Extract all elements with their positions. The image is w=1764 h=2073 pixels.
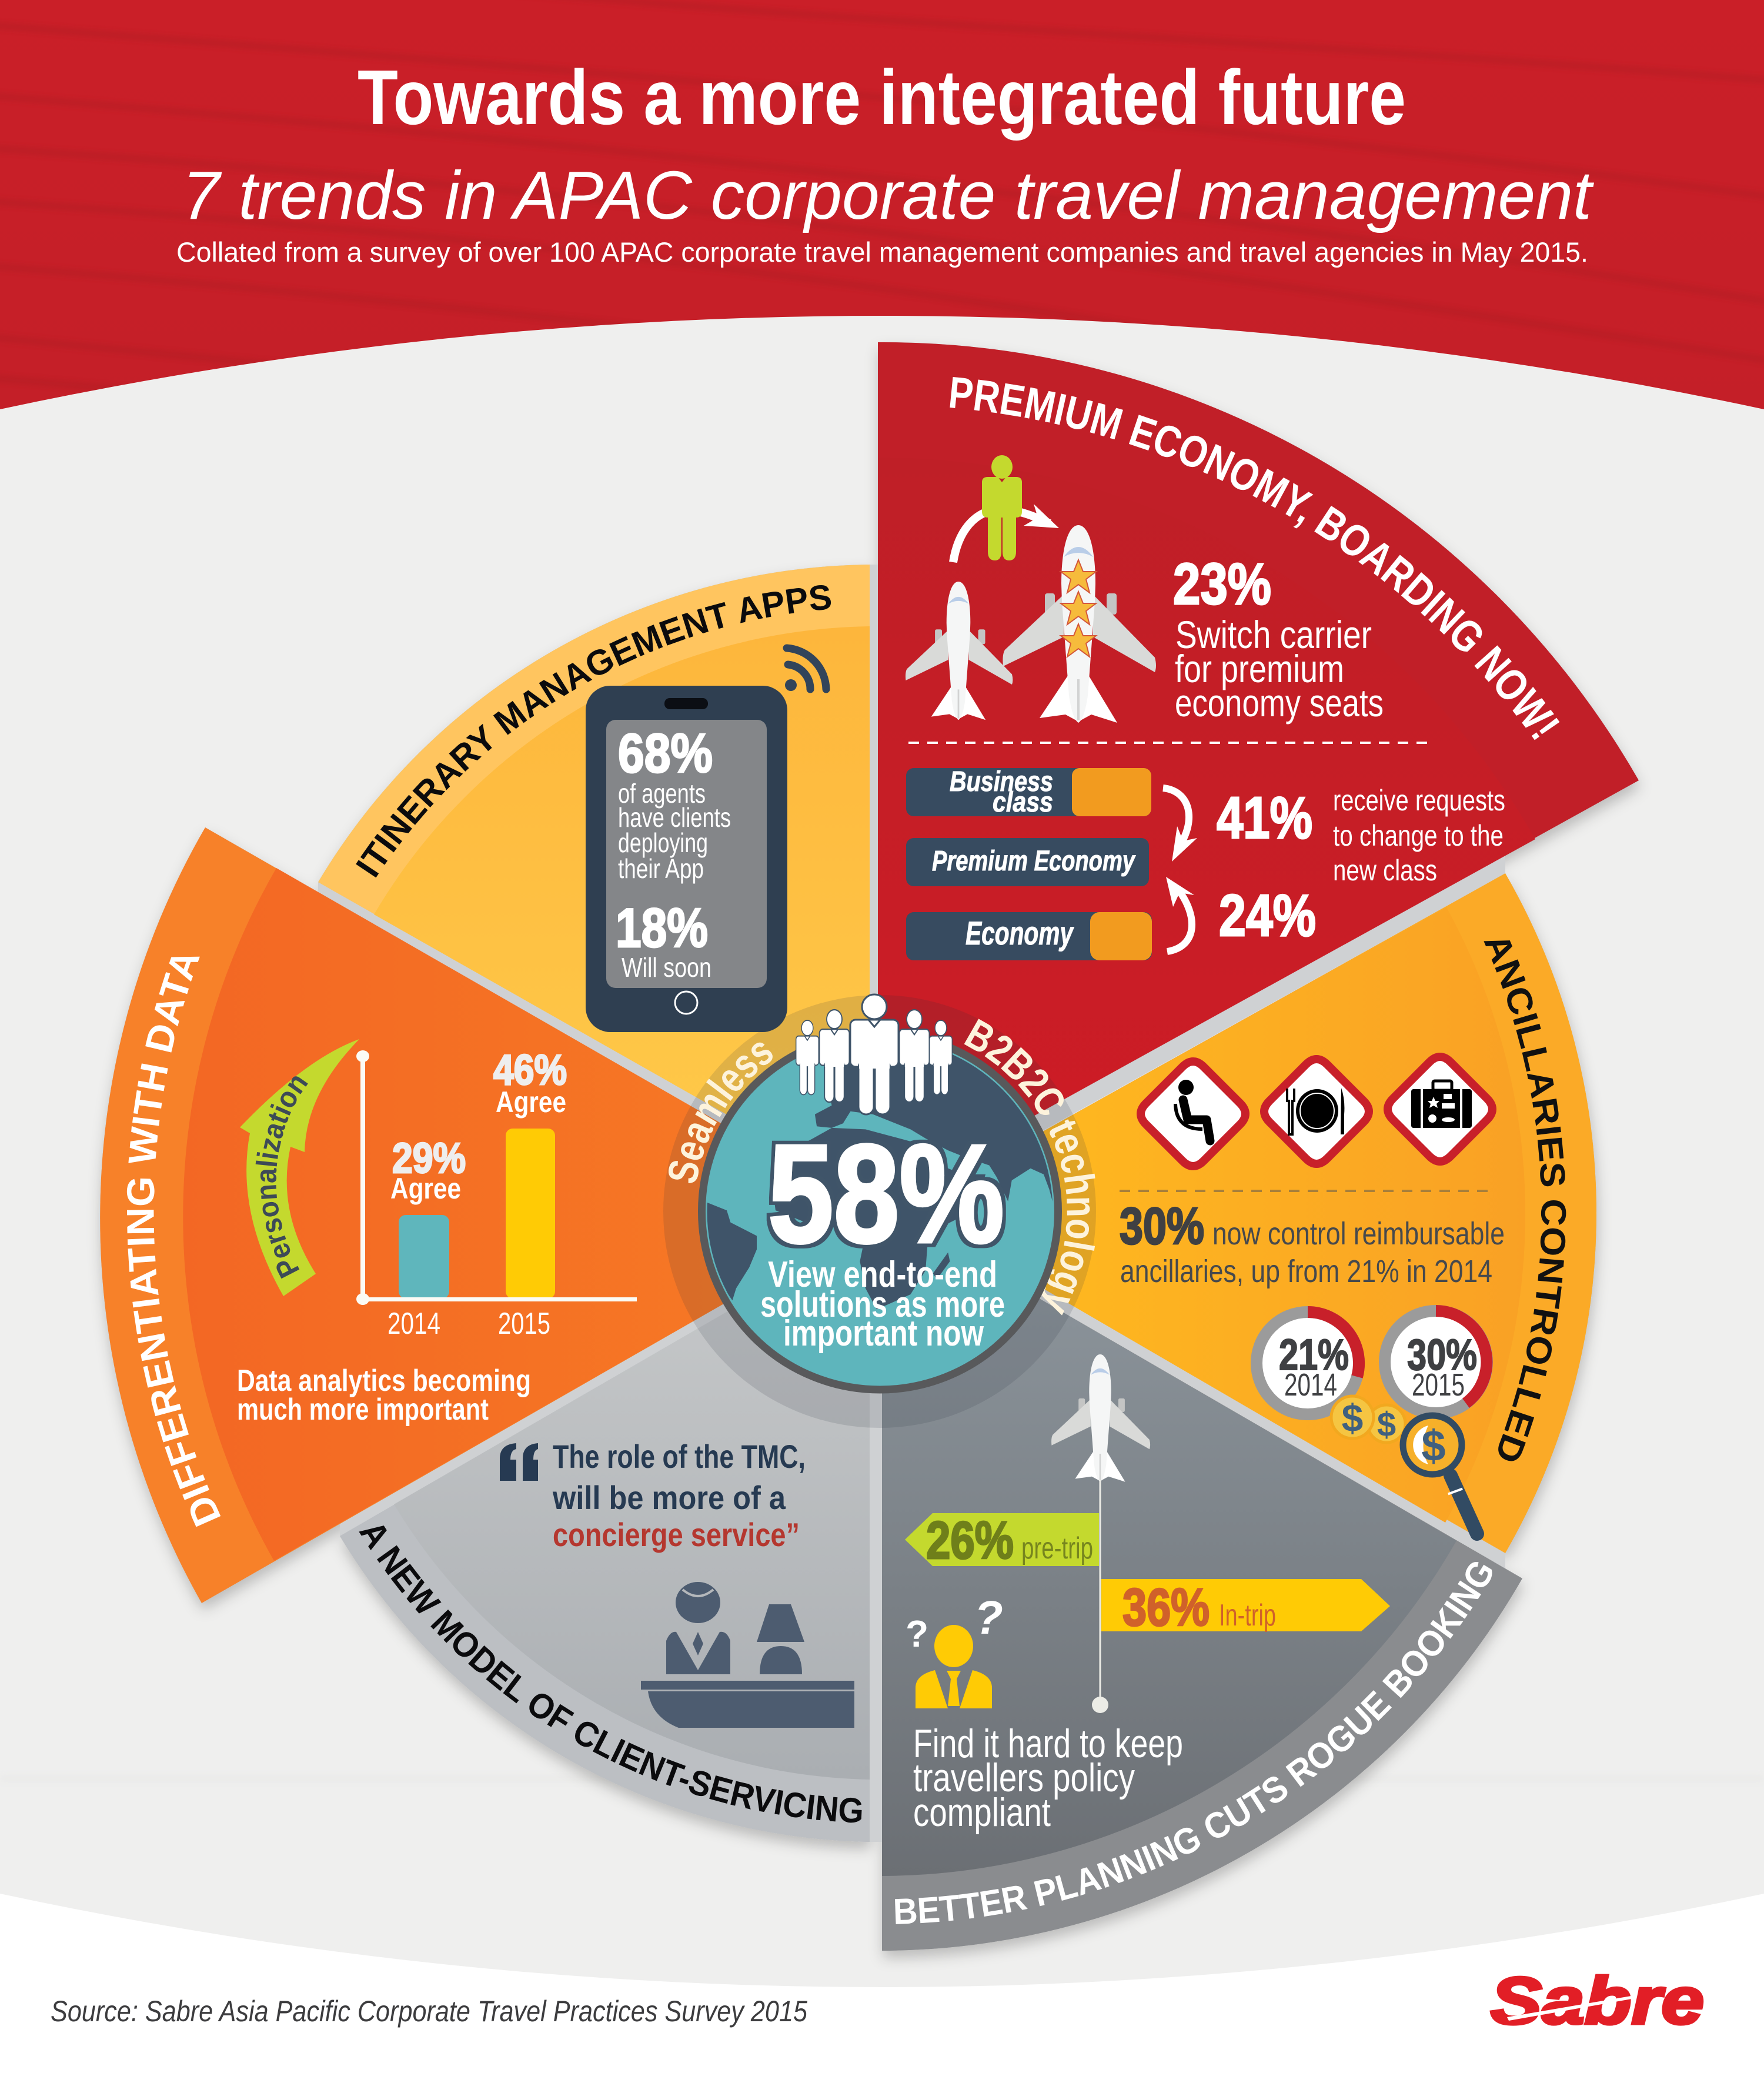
stat: 68 percent: of agents [618, 778, 706, 809]
callout: 26 percent pre-trip: pre-trip [1021, 1531, 1093, 1565]
stat: 68 percent: have clients [618, 802, 731, 833]
callout: 36 percent in-trip: In-trip [1219, 1598, 1276, 1633]
gaps between wedges [318, 565, 1505, 1842]
pill: premium economy: Premium Economy [932, 846, 1136, 877]
heading: differentiating with data: DIFFERENTIATING WITH DATA [127, 956, 221, 1527]
red header band [0, 0, 1764, 423]
logo: Sabre: Sabre [1491, 1964, 1704, 2038]
pill: business class: class [993, 787, 1053, 818]
stat: 68 percent: their App [618, 853, 704, 884]
icon: coins: $ [1342, 1396, 1363, 1440]
wedge: better planning [882, 1207, 1522, 1951]
icon: meal [1264, 1059, 1369, 1164]
callout: 26 percent pre-trip [905, 1511, 1099, 1570]
stat: 18 percent: 18% [616, 897, 708, 959]
text: receive requests: receive requests [1333, 784, 1505, 817]
text: data analytics [237, 1364, 531, 1427]
icon: seat [1141, 1061, 1245, 1166]
chart: donut 2015 [1385, 1311, 1487, 1413]
source: Source: Sabre Asia Pacific Corporate Travel Practices Survey 2015 [51, 1995, 807, 2028]
bar chart: Agree [390, 1172, 461, 1205]
panel: differentiating with data [118, 944, 637, 1533]
text: policy compliance: travellers policy [913, 1755, 1135, 1800]
subtitle: 7 trends in APAC corporate travel management [182, 157, 1595, 233]
stat: 41 percent: 41% [1217, 785, 1312, 851]
icon: magnifying glass [1403, 1416, 1477, 1534]
stat: 68 percent [618, 722, 731, 884]
icon: coins [1331, 1396, 1405, 1444]
callout: 36 percent in-trip: 36% [1122, 1578, 1210, 1637]
title: Towards a more integrated future [358, 54, 1406, 141]
stat: 23 percent: economy seats [1175, 681, 1384, 725]
text: policy compliance [913, 1721, 1183, 1835]
text: receive requests: to change to the [1333, 819, 1504, 852]
panel: new model of client servicing [352, 1438, 865, 1831]
stat: 30 percent text: ancillaries, up from 21% in 2014 [1120, 1254, 1492, 1289]
curved label: B2B2C technology: B2B2C technology [964, 1019, 1095, 1316]
arrow: business down to premium [1163, 788, 1197, 862]
quote text: The role of the TMC, [553, 1438, 806, 1475]
bar chart: Agree [496, 1086, 566, 1119]
wedge shadows [100, 342, 1639, 1951]
icon: green traveller [982, 455, 1022, 560]
text: receive requests: new class [1333, 854, 1437, 887]
text: data analytics: Data analytics becoming [237, 1364, 531, 1398]
icon: personalization arrow [240, 1039, 359, 1296]
bar chart: 2015 [498, 1307, 550, 1341]
stat: 68 percent: 68% [618, 722, 713, 784]
quote text: will be more of a [552, 1479, 786, 1516]
stat: 18 percent [616, 897, 711, 983]
panel: itinerary management apps [348, 577, 834, 1032]
stat: 30 percent text: 30% [1120, 1197, 1204, 1255]
chart: donut 2015: 2015 [1412, 1367, 1465, 1403]
chart: donut 2014: 2014 [1284, 1367, 1337, 1403]
chart: donut 2015: 30% [1407, 1330, 1477, 1379]
timeline line [1092, 1480, 1108, 1713]
stat: 58 percent: 58% [768, 1116, 1004, 1272]
wedge: new model of client servicing [340, 1229, 870, 1842]
icon: confused traveller: ? [906, 1613, 928, 1655]
icon: magnifying glass: $ [1421, 1421, 1446, 1470]
bar chart [356, 1047, 637, 1341]
pill: premium economy [906, 838, 1149, 886]
icon: personalization arrow: Personalization [255, 1076, 308, 1278]
globe [693, 1033, 1058, 1390]
icon: group of business people [796, 994, 952, 1114]
text: policy compliance: compliant [913, 1790, 1051, 1835]
icon: wifi signal [785, 648, 826, 691]
stat: 23 percent: Switch carrier [1175, 613, 1372, 656]
icon: big plane with stars [1003, 525, 1156, 723]
stat: 24 percent: 24% [1219, 883, 1316, 949]
wedge: premium economy [878, 342, 1639, 1202]
stat: 23 percent [1173, 551, 1384, 725]
text: data analytics: much more important [237, 1393, 489, 1427]
quote text [552, 1438, 806, 1553]
icon: arrow over traveller [953, 504, 1059, 562]
pill: business class: Business [950, 766, 1053, 797]
icon: quote mark [500, 1443, 538, 1481]
arrow: economy up to premium [1166, 877, 1194, 952]
survey note: Collated from a survey of over 100 APAC corporate travel management companies and travel agencies in May 2015. [176, 236, 1588, 268]
panel: premium economy [906, 368, 1569, 960]
stat: 23 percent: 23% [1173, 551, 1271, 616]
wedge: ancillaries controlled [1000, 873, 1596, 1553]
icon: suitcase [1388, 1057, 1492, 1161]
stat: 23 percent: for premium [1175, 647, 1344, 690]
heading: new model: A NEW MODEL OF CLIENT-SERVICING [359, 1525, 862, 1823]
quote text: concierge service” [553, 1516, 800, 1553]
heading: ancillaries controlled: ANCILLARIES CONTROLLED [1484, 940, 1566, 1461]
callout: 26 percent pre-trip: 26% [926, 1511, 1014, 1570]
icon: small plane [906, 582, 1013, 720]
pill: economy [906, 912, 1152, 960]
bar chart: 2014 [387, 1307, 440, 1341]
heading: better planning: BETTER PLANNING CUTS ROGUE BOOKING [895, 1562, 1492, 1924]
pill: business class [906, 766, 1151, 818]
text: receive requests [1333, 784, 1505, 887]
curved label: seamless: Seamless [669, 1042, 773, 1183]
panel: better planning cuts rogue booking [893, 1354, 1503, 1932]
bar chart: 29% [392, 1135, 466, 1182]
wedge: itinerary management apps [318, 565, 870, 1196]
chart: donut 2014: 21% [1279, 1330, 1349, 1379]
icon: coins: $ [1377, 1406, 1396, 1444]
centre halo ring [663, 995, 1096, 1428]
panel: ancillaries controlled [1120, 928, 1573, 1534]
stat: 18 percent: Will soon [622, 952, 711, 983]
bar chart: 46% [493, 1047, 567, 1094]
panel: centre globe [669, 994, 1095, 1394]
icon: confused traveller: ? [974, 1591, 1003, 1644]
text: policy compliance: Find it hard to keep [913, 1721, 1183, 1766]
stat: 30 percent text: now control reimbursable [1212, 1216, 1505, 1251]
stat: 30 percent text [1120, 1197, 1505, 1289]
icon: confused traveller [906, 1591, 1003, 1708]
callout: 36 percent in-trip [1101, 1578, 1390, 1637]
chart: donut 2014 [1257, 1312, 1359, 1414]
heading: itinerary apps: ITINERARY MANAGEMENT APPS [356, 585, 831, 877]
pill: economy: Economy [965, 914, 1074, 952]
stat: 68 percent: deploying [618, 827, 708, 858]
heading: premium economy: PREMIUM ECONOMY, BOARDING NOW! [950, 377, 1559, 740]
wedge: differentiating with data [100, 827, 880, 1603]
text: view end-to-end [760, 1254, 1005, 1354]
text: view end-to-end: View end-to-end [768, 1254, 997, 1295]
icon: concierge desk [641, 1582, 854, 1728]
icon: plane on timeline [1051, 1354, 1150, 1482]
text: view end-to-end: important now [783, 1313, 984, 1354]
text: view end-to-end: solutions as more [760, 1284, 1005, 1325]
icon: smartphone [586, 686, 787, 1032]
